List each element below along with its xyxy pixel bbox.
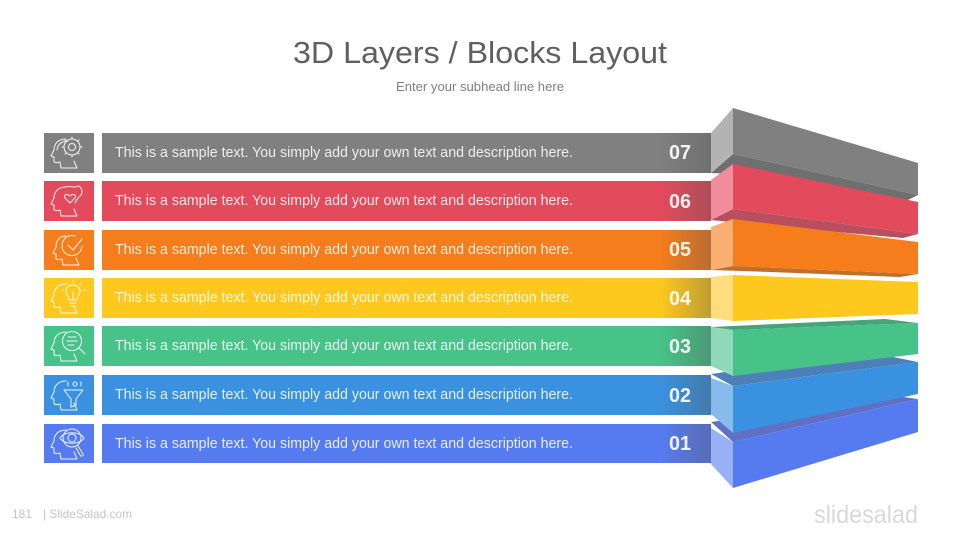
icon: head with eye and magnifier bbox=[44, 424, 94, 463]
row 02 bbox=[44, 375, 711, 415]
bar: This is a sample text. You simply add your own text and description here. bbox=[115, 145, 573, 161]
bar: 02 bbox=[669, 385, 691, 407]
bar: This is a sample text. You simply add your own text and description here. bbox=[115, 387, 573, 403]
icon: head with funnel bbox=[44, 375, 94, 415]
block 03 green bbox=[711, 319, 918, 376]
icon: head with magnifier bbox=[44, 326, 94, 366]
block 01 indigo bbox=[711, 397, 918, 488]
title: 3D Layers / Blocks Layout bbox=[293, 35, 667, 70]
row 04 bbox=[44, 278, 711, 318]
bar: 07 bbox=[669, 142, 691, 164]
icon: head with light bulb bbox=[44, 278, 94, 318]
footer logo: slidesalad bbox=[814, 501, 918, 529]
bar bbox=[102, 375, 711, 415]
bar: 03 bbox=[669, 336, 691, 358]
row 01 bbox=[44, 424, 711, 463]
bar: 06 bbox=[669, 191, 691, 213]
bar bbox=[102, 230, 711, 270]
bar: This is a sample text. You simply add your own text and description here. bbox=[115, 193, 573, 209]
footer site name: | SlideSalad.com bbox=[43, 507, 132, 521]
footer page number: 181 bbox=[12, 507, 32, 521]
block 06 red bbox=[711, 164, 918, 238]
3D block stack bbox=[711, 108, 918, 488]
block 07 grey bbox=[711, 108, 918, 200]
icon: head with gear bbox=[44, 133, 94, 173]
subtitle: Enter your subhead line here bbox=[396, 79, 564, 94]
icon: head with check bbox=[44, 230, 94, 270]
bar: This is a sample text. You simply add your own text and description here. bbox=[115, 436, 573, 452]
bar: 04 bbox=[669, 288, 692, 310]
row 06 bbox=[44, 181, 711, 221]
block 02 blue bbox=[711, 357, 918, 433]
row 03 bbox=[44, 326, 711, 366]
bar bbox=[102, 133, 711, 173]
bar: This is a sample text. You simply add your own text and description here. bbox=[115, 338, 573, 354]
bar: This is a sample text. You simply add your own text and description here. bbox=[115, 290, 573, 306]
row 07 bbox=[44, 133, 711, 173]
row 05 bbox=[44, 230, 711, 270]
bar: 05 bbox=[669, 239, 691, 261]
bar bbox=[102, 278, 711, 318]
block 04 yellow bbox=[711, 275, 918, 321]
icon: head with heart bbox=[44, 181, 94, 221]
bar bbox=[102, 424, 711, 463]
bar bbox=[102, 326, 711, 366]
bar bbox=[102, 181, 711, 221]
bar: This is a sample text. You simply add your own text and description here. bbox=[115, 242, 573, 258]
bar: 01 bbox=[669, 433, 691, 455]
block 05 orange bbox=[711, 219, 918, 277]
